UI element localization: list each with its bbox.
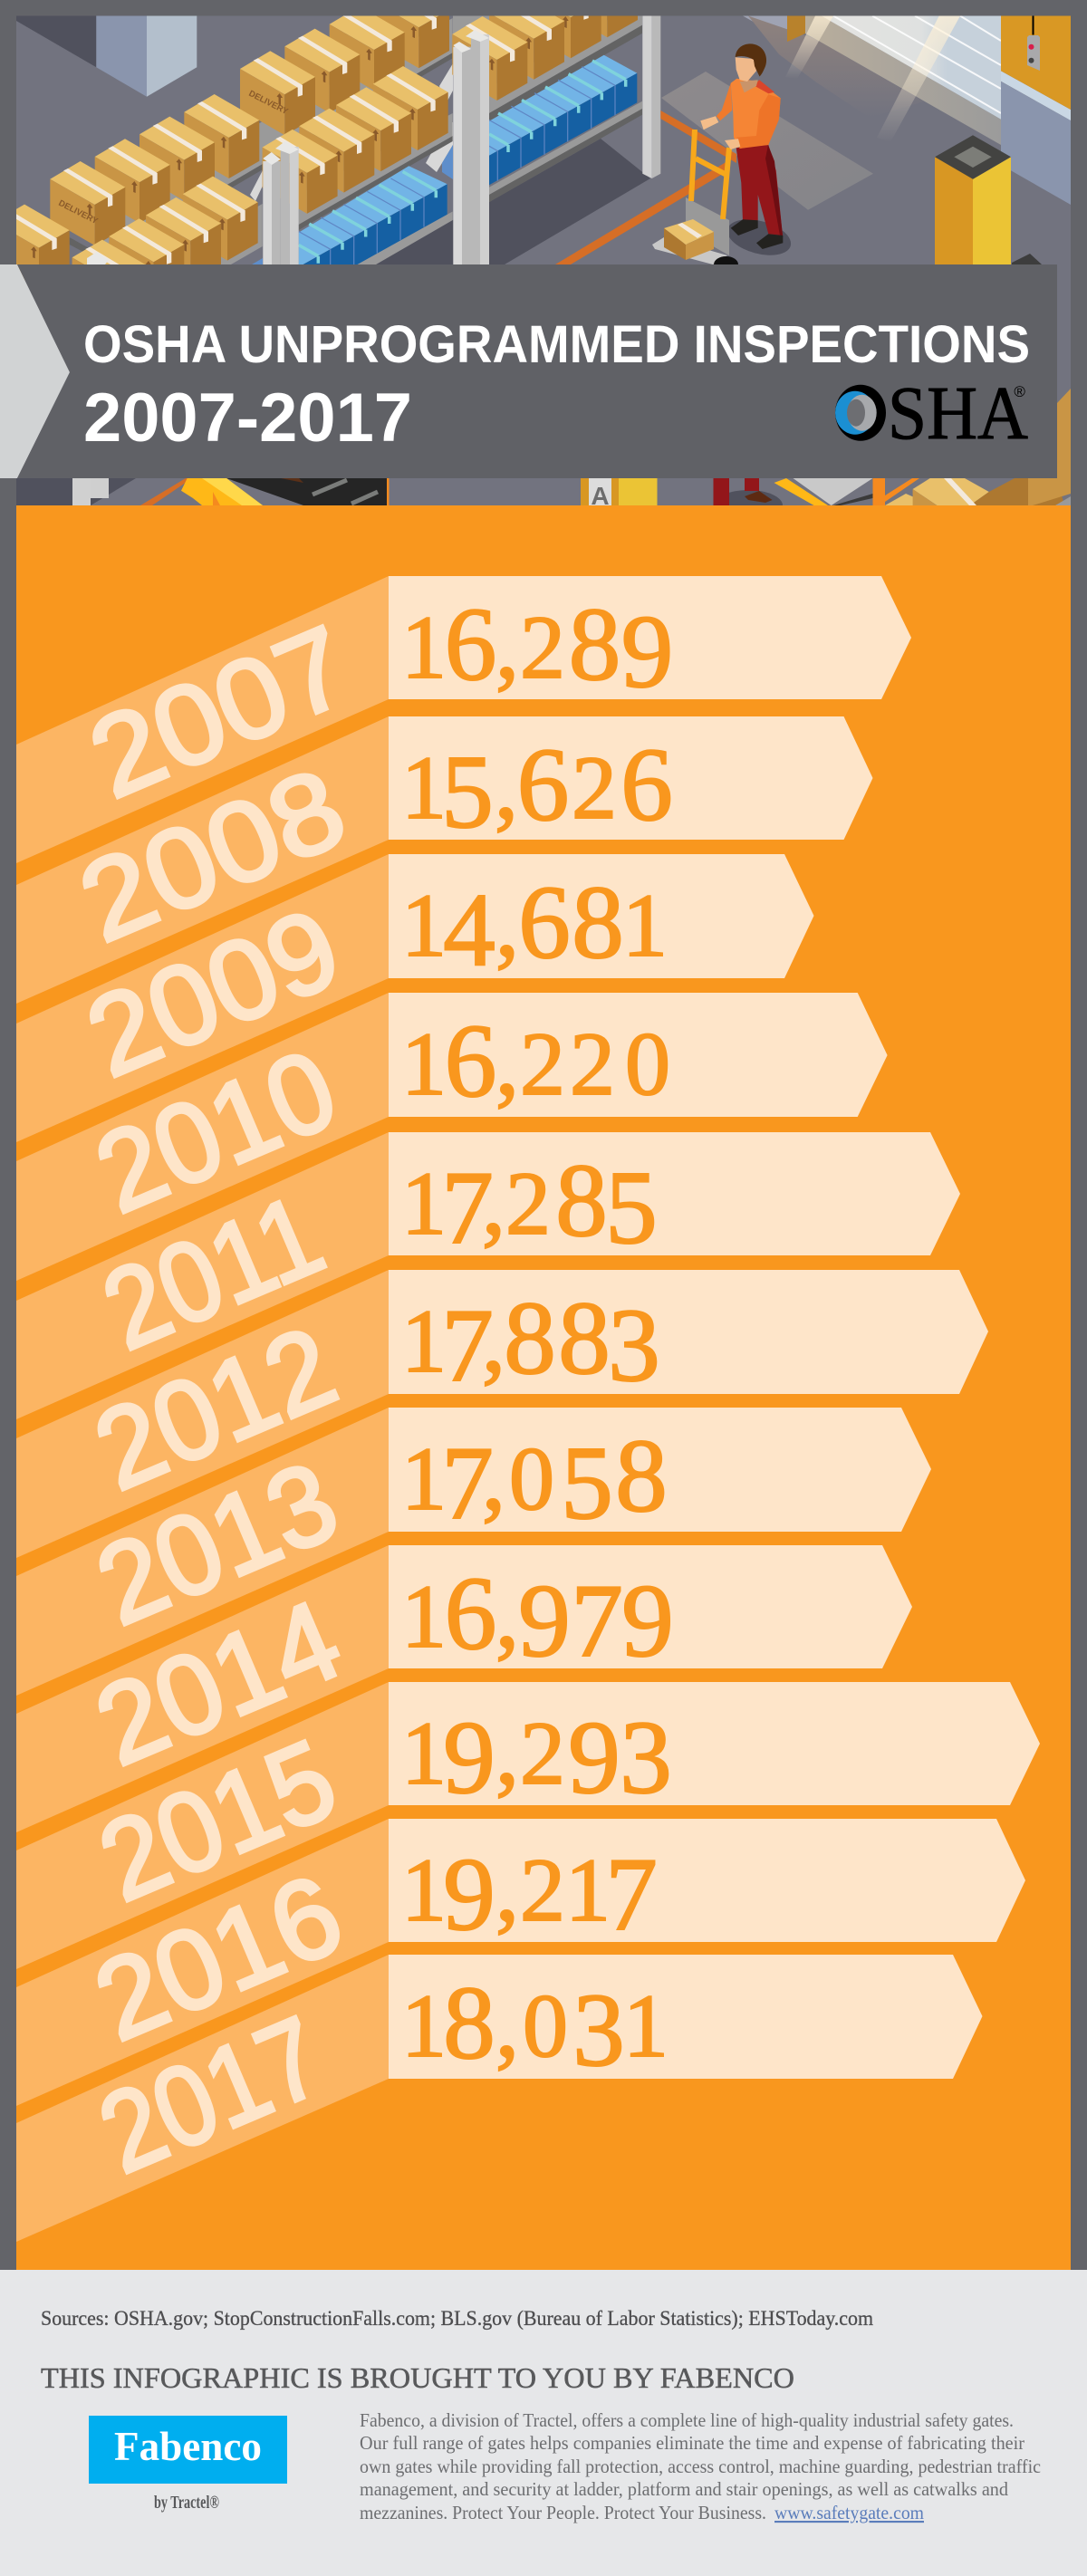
- Fabenco logo: by Tractel®: [154, 2493, 219, 2513]
- year: 2015: [82, 1716, 352, 1926]
- value: ,: [495, 870, 519, 976]
- bottom strip: pallet jack: [774, 478, 919, 505]
- value: 8: [555, 1143, 608, 1258]
- value: 4: [443, 872, 495, 987]
- row 2013: [16, 1408, 931, 1696]
- value: 2: [520, 1014, 565, 1114]
- value: ,: [482, 1149, 505, 1254]
- value: 2: [572, 737, 617, 838]
- date range: 2007-2017: [83, 380, 412, 457]
- upper shelf plank: [69, 16, 642, 252]
- bar: [389, 1408, 931, 1532]
- OSHA logo: [835, 371, 1028, 456]
- value: 1: [565, 1840, 611, 1940]
- value: ,: [495, 733, 518, 839]
- floor shadow under racks: [376, 139, 650, 264]
- value: 9: [443, 1837, 495, 1952]
- value: 1: [401, 1153, 447, 1254]
- value: 8: [572, 865, 624, 980]
- bar: [389, 1819, 1025, 1942]
- band: [16, 1270, 389, 1558]
- right edge box: [1057, 389, 1071, 478]
- row 2017: [16, 1955, 982, 2242]
- rack posts: [87, 16, 660, 265]
- bottom strip: pillar with letter A: A: [591, 482, 610, 510]
- worker: [700, 43, 783, 249]
- year: 2013: [80, 1437, 354, 1649]
- year: 2014: [79, 1576, 358, 1790]
- dark wedge and wall pillar: [16, 16, 197, 97]
- title banner: [0, 264, 1057, 478]
- value: 6: [445, 587, 496, 702]
- bar: [389, 1682, 1040, 1805]
- band: [16, 1682, 389, 1969]
- value: 9: [621, 1563, 674, 1678]
- warehouse illustration: [0, 0, 1071, 521]
- value: 1: [401, 1566, 447, 1667]
- bar: [389, 1545, 912, 1668]
- blue boxes: right bay: [489, 55, 637, 185]
- title text: OSHA UNPROGRAMMED INSPECTIONS: [83, 315, 1030, 374]
- year: 2012: [78, 1302, 352, 1514]
- value: ,: [495, 592, 519, 698]
- value: 8: [504, 1281, 556, 1396]
- value: 8: [558, 1281, 611, 1396]
- band: [16, 576, 389, 863]
- row 2014: [16, 1545, 912, 1832]
- year: 2008: [63, 745, 362, 966]
- value: 8: [615, 1418, 668, 1533]
- value: 7: [441, 1288, 494, 1403]
- value: 6: [445, 1004, 496, 1119]
- bar: [389, 854, 813, 978]
- value: 3: [620, 1700, 672, 1815]
- row 2015: [16, 1682, 1040, 1969]
- value: 2: [505, 1153, 551, 1254]
- sponsor heading: THIS INFOGRAPHIC IS BROUGHT TO YOU BY FABENCO: [41, 2361, 794, 2394]
- blue boxes: left bay: [252, 145, 453, 264]
- value: 0: [509, 1428, 554, 1529]
- value: 6: [445, 1556, 496, 1671]
- banner body: [17, 264, 1057, 478]
- hand truck: [652, 130, 738, 264]
- value: 7: [571, 1563, 623, 1678]
- cardboard boxes: right bay: [452, 16, 638, 101]
- value: 6: [518, 865, 571, 980]
- year: 2017: [82, 1993, 341, 2197]
- value: ,: [482, 1286, 505, 1392]
- value: 1: [623, 1975, 669, 2076]
- value: 1: [401, 1975, 447, 2076]
- value: ,: [495, 1698, 519, 1804]
- row 2012: [16, 1270, 988, 1558]
- value: 5: [441, 735, 494, 850]
- value: 6: [517, 727, 569, 842]
- footer panel: [0, 2270, 1087, 2576]
- band: [16, 1132, 389, 1419]
- row 2007: [16, 576, 911, 863]
- bar: [389, 993, 888, 1117]
- bottom strip: pillar with letter A: [581, 478, 658, 505]
- band: [16, 854, 389, 1142]
- value: 0: [523, 1975, 568, 2076]
- value: ,: [495, 1009, 519, 1115]
- value: 9: [518, 1563, 571, 1678]
- value: 7: [605, 1837, 658, 1952]
- bottom strip: post and dark floor: [16, 478, 192, 505]
- year: 2010: [79, 1025, 353, 1237]
- year: 2011: [86, 1171, 340, 1374]
- year: 2016: [78, 1850, 359, 2065]
- value: 9: [621, 594, 673, 709]
- orange floor lines: [555, 111, 736, 264]
- value: 0: [625, 1014, 670, 1114]
- Fabenco logo: [89, 2416, 287, 2513]
- shadow under worker: [729, 219, 791, 255]
- orange chart panel: [16, 505, 1071, 2270]
- value: 5: [561, 1426, 613, 1541]
- value: 7: [441, 1150, 494, 1265]
- value: 1: [401, 875, 447, 976]
- cardboard boxes: back row: [240, 16, 449, 134]
- company description: [360, 2409, 1041, 2523]
- value: 6: [620, 727, 673, 842]
- row 2011: [16, 1132, 960, 1419]
- year: 2007: [72, 602, 368, 822]
- right wall with control box: [1001, 16, 1071, 205]
- band: [16, 716, 389, 1004]
- window and light area: [743, 16, 1001, 145]
- value: 3: [572, 1973, 625, 2088]
- company description: Fabenco, a division of Tractel, offers a complete line of high-quality industrial safety gates.: [360, 2409, 1014, 2431]
- year: 2009: [70, 885, 357, 1101]
- yellow bollard: [935, 135, 1042, 265]
- company description: mezzanines. Protect Your People. Protect Your Business.: [360, 2502, 766, 2523]
- cardboard boxes: front row: [0, 94, 259, 289]
- row 2008: [16, 716, 873, 1004]
- band: [16, 1408, 389, 1696]
- value: 1: [401, 1840, 447, 1940]
- bar: [389, 716, 873, 840]
- value: 2: [520, 1703, 565, 1803]
- lower shelf planks: [154, 101, 642, 264]
- company description: own gates while providing fall protection, access control, machine guarding, pedestrian traffic: [360, 2456, 1041, 2477]
- value: 1: [401, 1014, 447, 1114]
- value: 2: [520, 1840, 565, 1940]
- band: [16, 993, 389, 1281]
- company description: management, and security at ladder, platform and stair openings, as well as catwalks and: [360, 2478, 1008, 2500]
- bottom strip: boxes: [885, 478, 1071, 505]
- value: 2: [570, 1014, 615, 1114]
- cardboard boxes: back row: DELIVERY: [247, 89, 290, 117]
- value: 2: [520, 597, 565, 697]
- value: 7: [441, 1426, 494, 1541]
- value: 1: [401, 1428, 447, 1529]
- band: [16, 1819, 389, 2106]
- value: 1: [401, 737, 447, 838]
- value: 1: [401, 1703, 447, 1803]
- bar: [389, 576, 911, 699]
- bottom strip: worker legs: [714, 478, 783, 505]
- value: 9: [443, 1700, 495, 1815]
- company description: Our full range of gates helps companies eliminate the time and expense of fabricating their: [360, 2432, 1024, 2454]
- value: 5: [605, 1150, 658, 1265]
- row 2016: [16, 1819, 1025, 2106]
- sources: Sources: OSHA.gov; StopConstructionFalls.com; BLS.gov (Bureau of Labor Statistics); EHSToday.com: [41, 2307, 873, 2330]
- bar: [389, 1132, 960, 1255]
- floor mat: [661, 72, 873, 210]
- value: 1: [622, 875, 668, 976]
- band: [16, 1955, 389, 2242]
- company description: www.safetygate.com: [774, 2502, 924, 2523]
- value: 8: [569, 587, 620, 702]
- banner chevron: [0, 264, 70, 478]
- bar: [389, 1270, 988, 1394]
- OSHA logo: ®: [1014, 383, 1025, 400]
- value: 1: [401, 597, 447, 697]
- rear racking braces: [250, 63, 453, 201]
- cardboard boxes: front row: DELIVERY: [57, 198, 100, 226]
- value: 3: [608, 1288, 660, 1403]
- value: ,: [495, 1835, 519, 1941]
- cardboard boxes: middle shelf: [72, 66, 448, 264]
- bottom strip: forklift: [181, 478, 390, 505]
- band: [16, 1545, 389, 1832]
- row 2009: [16, 854, 813, 1142]
- value: ,: [495, 1971, 519, 2077]
- value: 9: [568, 1700, 620, 1815]
- bar: [389, 1955, 982, 2079]
- row 2010: [16, 993, 888, 1281]
- value: ,: [482, 1424, 505, 1530]
- value: 1: [401, 1291, 447, 1391]
- OSHA logo: SHA: [888, 371, 1028, 456]
- Fabenco logo: Fabenco: [114, 2423, 262, 2469]
- value: 8: [443, 1966, 495, 2081]
- value: ,: [495, 1562, 519, 1668]
